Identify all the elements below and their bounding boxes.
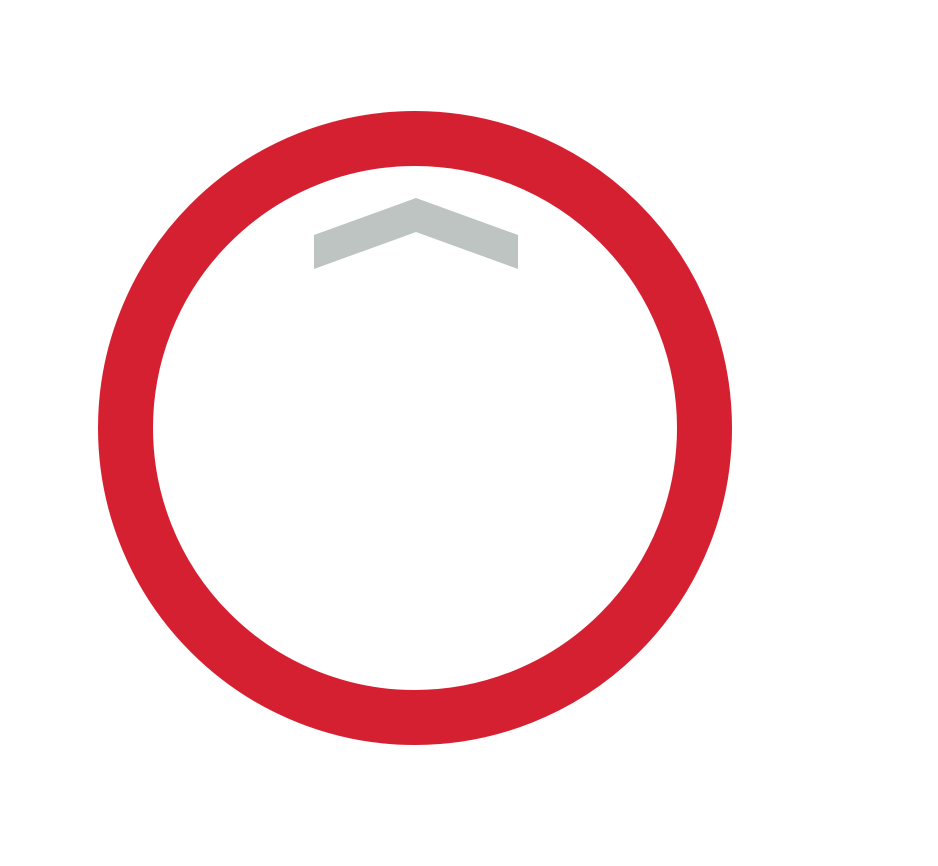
- icon: grey chevron up: [314, 198, 518, 269]
- red ring: [126, 138, 704, 718]
